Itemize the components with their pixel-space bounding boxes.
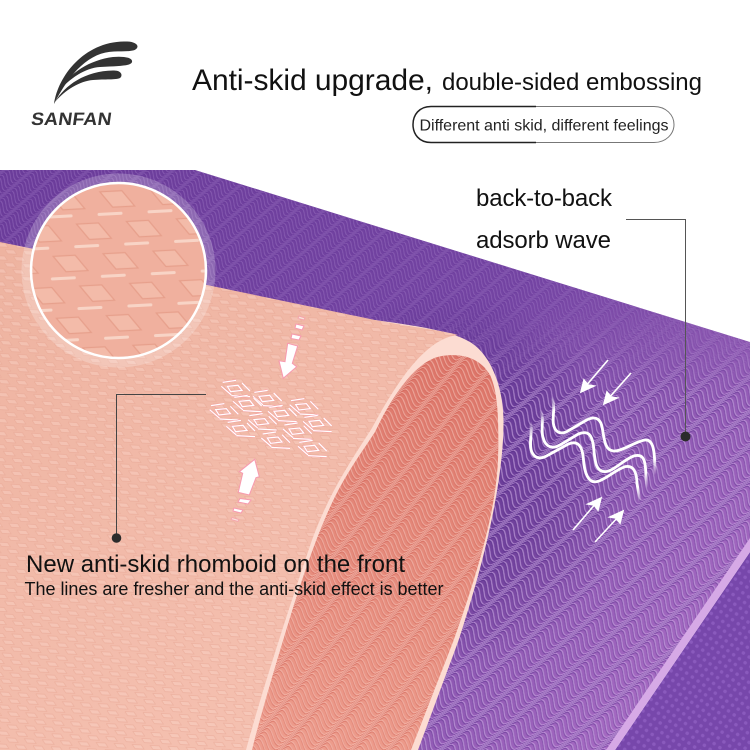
panel: pink mat front face [0, 242, 458, 750]
arrow: pink arrow pointing down [279, 316, 305, 378]
title: Anti-skid upgrade, [192, 64, 433, 97]
pill: tagline: Different anti skid, different feelings [420, 118, 668, 134]
arrow: pink arrow pointing up [231, 459, 259, 522]
icon: rhomboid pattern cluster [210, 380, 332, 457]
label: adsorb wave: adsorb wave [476, 227, 611, 254]
heading: front rhomboid: New anti-skid rhomboid on the front [26, 551, 405, 578]
arrows: white arrows pressing on the wave [573, 360, 631, 542]
panel: purple mat back surface [0, 170, 750, 750]
panel: purple underside corner [606, 538, 750, 750]
leader: back wave callout line [626, 220, 690, 442]
text: front rhomboid description: The lines are fresher and the anti-skid effect is better [24, 579, 444, 599]
callout: magnified rhomboid texture circle [20, 170, 220, 370]
label: back-to-back: back-to-back [476, 185, 613, 212]
panel: pink rim and salmon inner roll [240, 320, 504, 750]
leader: front rhomboid callout line [112, 394, 206, 543]
logo: SANFAN feather mark and wordmark: SANFAN [30, 109, 113, 129]
pill: tagline [413, 106, 674, 142]
logo: SANFAN feather mark and wordmark [30, 41, 137, 129]
icon: glowing wave lines [530, 397, 655, 502]
subtitle: double-sided embossing [442, 69, 702, 96]
